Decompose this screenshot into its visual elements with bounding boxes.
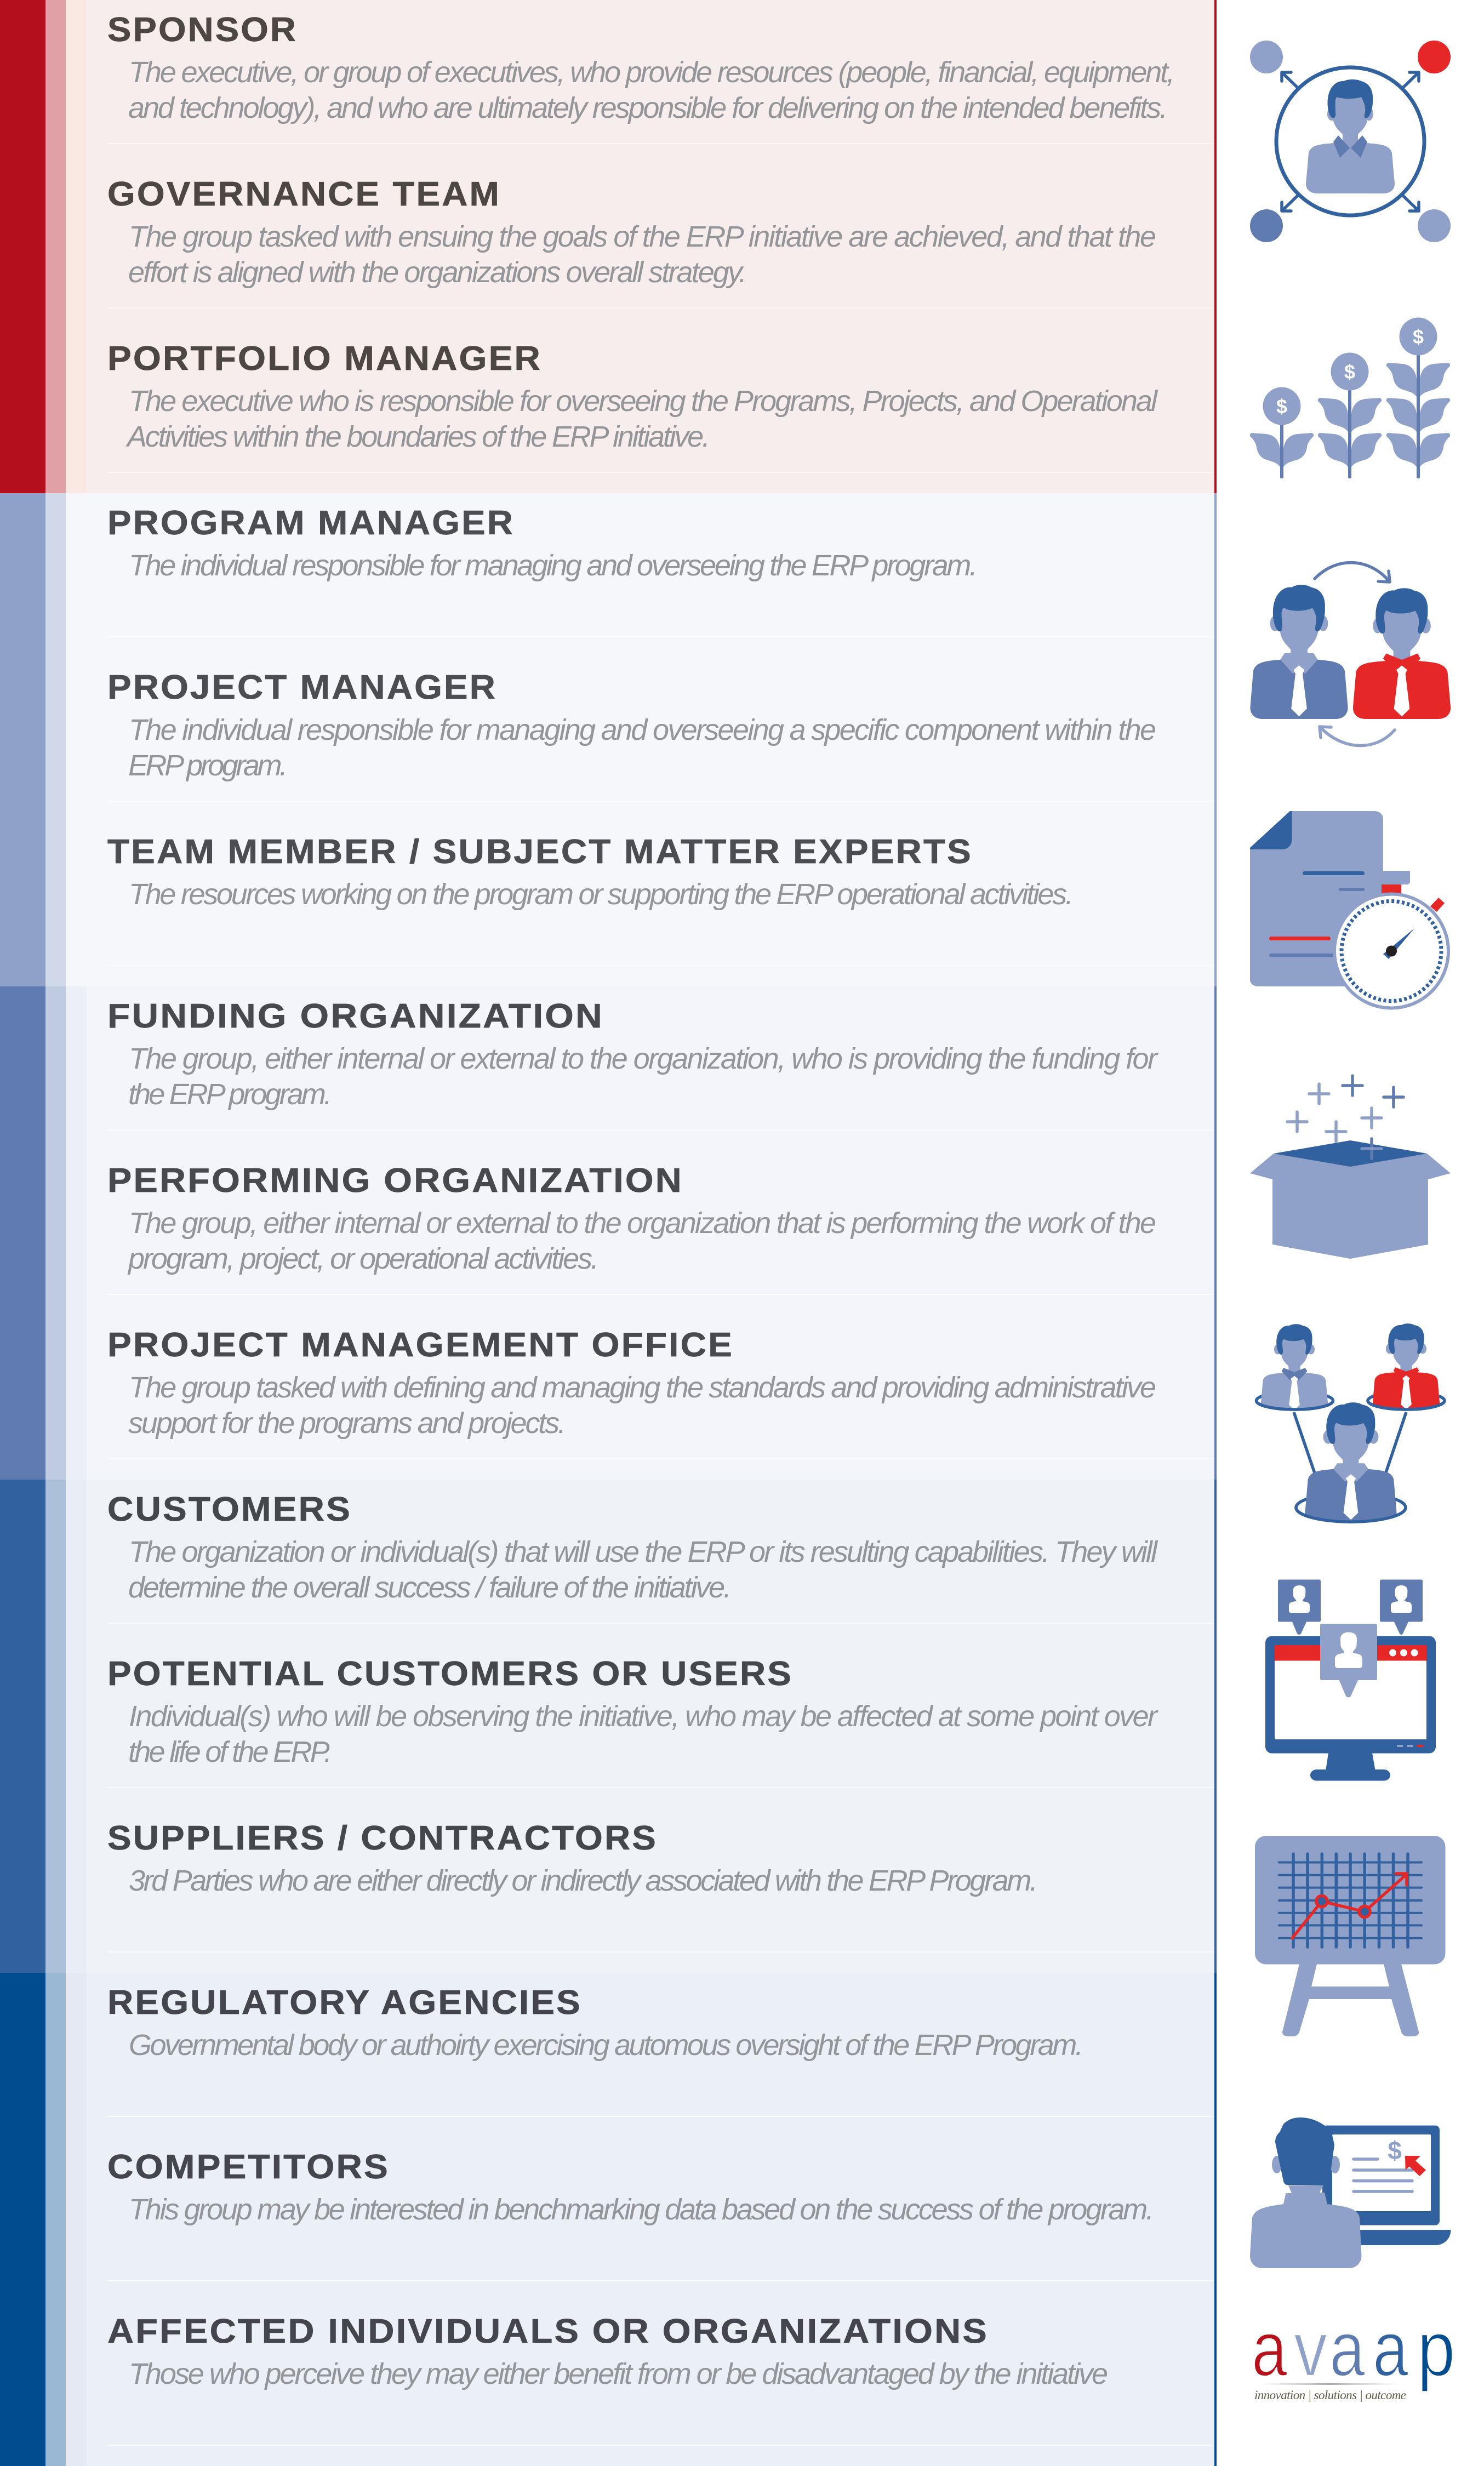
icon: person at laptop	[1250, 2117, 1451, 2268]
logo wordmark	[1252, 2305, 1456, 2393]
row: potential customers or users	[107, 1655, 1158, 1768]
description: potential customers or users: the life of the ERP.	[128, 1736, 332, 1768]
logo wordmark: a	[1329, 2305, 1365, 2393]
heading: potential customers or users: POTENTIAL CUSTOMERS OR USERS	[107, 1655, 793, 1693]
description: customers: determine the overall success / failure of the initiative.	[128, 1571, 732, 1604]
row: performing organization	[107, 1162, 1156, 1275]
logo wordmark: a	[1373, 2305, 1408, 2393]
icon: document and stopwatch	[1250, 811, 1448, 1008]
logo: avaap	[1252, 2305, 1456, 2402]
row: sponsor	[107, 11, 1175, 124]
row: regulatory agencies	[107, 1984, 1083, 2062]
description: regulatory agencies: Governmental body or authoirty exercising automous oversight of the ERP Program.	[129, 2029, 1083, 2062]
description: governance team: The group tasked with ensuing the goals of the ERP initiative are achieved, and that the	[129, 220, 1156, 253]
row: competitors	[107, 2148, 1154, 2226]
description: sponsor: and technology), and who are ultimately responsible for delivering on the intended benefits.	[128, 92, 1168, 124]
description: governance team	[128, 220, 1156, 289]
icon: money plants: $	[1344, 361, 1355, 383]
description: project manager: The individual responsible for managing and overseeing a specific component within the	[129, 713, 1156, 746]
icon: two people exchanging	[1250, 563, 1451, 746]
description: funding organization	[128, 1042, 1158, 1111]
description: suppliers: 3rd Parties who are either directly or indirectly associated with the ERP Program.	[129, 1864, 1038, 1897]
heading: funding organization: FUNDING ORGANIZATION	[107, 997, 604, 1035]
row: funding organization	[107, 997, 1158, 1111]
icon: sponsor person with arrows	[1250, 41, 1451, 242]
row: program manager	[107, 504, 978, 582]
description: potential customers or users	[128, 1700, 1158, 1768]
icon: three connected people	[1256, 1323, 1445, 1522]
description: team member: The resources working on the program or supporting the ERP operational activities.	[129, 878, 1074, 911]
description: program manager: The individual responsible for managing and overseeing the ERP program.	[129, 549, 978, 582]
logo wordmark: a	[1252, 2305, 1287, 2393]
description: sponsor: The executive, or group of executives, who provide resources (people, financial, equipment,	[129, 56, 1175, 89]
row: portfolio manager	[107, 340, 1158, 453]
row: customers	[107, 1491, 1158, 1604]
row: team member	[107, 833, 1074, 911]
description: project management office: The group tasked with defining and managing the standards and providing administrative	[129, 1371, 1156, 1404]
row: project management office	[107, 1326, 1156, 1440]
panel: management band background	[0, 493, 1217, 986]
description: performing organization: program, project, or operational activities.	[127, 1242, 599, 1275]
description: affected individuals: Those who perceive they may either benefit from or be disadvantaged by the initiative	[129, 2357, 1108, 2390]
logo tagline: innovation | solutions | outcome	[1254, 2388, 1406, 2402]
heading: suppliers: SUPPLIERS / CONTRACTORS	[107, 1819, 658, 1857]
heading: regulatory agencies: REGULATORY AGENCIES	[107, 1984, 582, 2022]
icon: person at laptop: $	[1388, 2136, 1402, 2165]
heading: project manager: PROJECT MANAGER	[107, 669, 497, 706]
icon: money plants	[1250, 318, 1450, 478]
description: performing organization: The group, either internal or external to the organization that is performing the work of the	[129, 1207, 1156, 1240]
description: project manager	[128, 713, 1156, 782]
icon: monitor with user pins	[1265, 1579, 1436, 1781]
panel: external band background	[0, 1973, 1217, 2466]
description: sponsor	[128, 56, 1175, 124]
heading: affected individuals: AFFECTED INDIVIDUALS OR ORGANIZATIONS	[107, 2313, 989, 2350]
panel: customer band background	[0, 1480, 1217, 1973]
heading: team member: TEAM MEMBER / SUBJECT MATTER EXPERTS	[107, 833, 973, 871]
icon: money plants: $	[1276, 395, 1287, 418]
heading: portfolio manager: PORTFOLIO MANAGER	[107, 340, 542, 378]
heading: competitors: COMPETITORS	[107, 2148, 390, 2186]
description: customers	[128, 1535, 1158, 1604]
heading: customers: CUSTOMERS	[107, 1491, 352, 1528]
panel: organization band background	[0, 986, 1217, 1480]
heading: program manager: PROGRAM MANAGER	[107, 504, 515, 542]
description: portfolio manager: Activities within the boundaries of the ERP initiative.	[125, 420, 710, 453]
description: competitors: This group may be interested in benchmarking data based on the success of the program.	[129, 2193, 1154, 2226]
heading: sponsor: SPONSOR	[107, 11, 298, 49]
icon: open box with plus signs	[1250, 1076, 1451, 1259]
panel: executive band background	[0, 0, 1217, 493]
description: performing organization	[127, 1207, 1156, 1275]
description: project management office: support for the programs and projects.	[128, 1407, 566, 1440]
row: project manager	[107, 669, 1156, 782]
icon: money plants: $	[1413, 326, 1424, 348]
heading: governance team: GOVERNANCE TEAM	[107, 175, 501, 213]
description: funding organization: the ERP program.	[128, 1078, 332, 1111]
description: funding organization: The group, either internal or external to the organization, who is providing the funding for	[129, 1042, 1158, 1075]
icon: chart on easel	[1255, 1836, 1446, 2036]
description: customers: The organization or individual(s) that will use the ERP or its resulting capabilities. They will	[129, 1535, 1158, 1568]
description: governance team: effort is aligned with the organizations overall strategy.	[128, 256, 747, 289]
description: project manager: ERP program.	[128, 749, 288, 782]
logo wordmark: v	[1294, 2305, 1327, 2393]
row: suppliers	[107, 1819, 1038, 1897]
description: potential customers or users: Individual(s) who will be observing the initiative, who may be affected at some point over	[129, 1700, 1158, 1733]
description: portfolio manager	[125, 385, 1158, 453]
logo wordmark: p	[1417, 2306, 1456, 2393]
heading: project management office: PROJECT MANAGEMENT OFFICE	[107, 1326, 734, 1364]
heading: performing organization: PERFORMING ORGANIZATION	[107, 1162, 683, 1200]
description: portfolio manager: The executive who is responsible for overseeing the Programs, Projects, and Operational	[129, 385, 1158, 418]
description: project management office	[128, 1371, 1156, 1440]
row: governance team	[107, 175, 1156, 289]
row: affected individuals	[107, 2313, 1108, 2390]
